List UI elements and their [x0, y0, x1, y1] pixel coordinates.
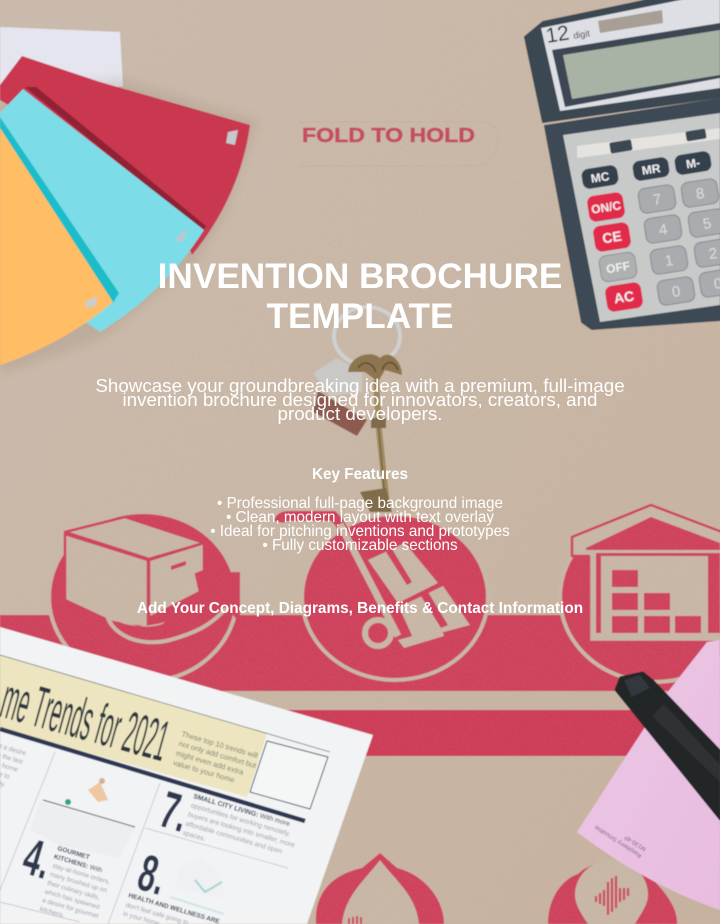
flyer: home trends for 2021: [0, 627, 373, 924]
feature list: • Clean, modern layout with text overlay: [226, 509, 494, 526]
icon: hand truck with boxes: [279, 514, 488, 680]
function keys: MR: [641, 161, 662, 178]
function keys: MC: [590, 169, 611, 186]
number keys: 8: [695, 185, 706, 203]
flyer item 7: buyers are looking into smaller, more: [187, 811, 296, 849]
function keys: CE: [601, 228, 623, 246]
flyer rule: [0, 729, 305, 821]
icon: box with return arrow: [49, 512, 240, 682]
flyer item 8: 8.: [132, 844, 173, 907]
flashlight: [615, 672, 720, 820]
flyer cut-off text: [0, 742, 27, 792]
heading: TEMPLATE: [266, 297, 454, 336]
flyer item 4: KITCHENS: With: [53, 854, 103, 874]
flyer item 7: spaces.: [182, 830, 206, 843]
feature list: [210, 495, 510, 554]
subtitle: product developers.: [278, 403, 442, 424]
lower icon: drop: [316, 853, 444, 924]
12 digit: 12 digit: [544, 18, 591, 48]
flyer item 4: their culinary skills,: [46, 880, 101, 902]
solar panel: [598, 10, 663, 33]
paint chip: orange: [0, 128, 113, 365]
function keys: [581, 150, 712, 313]
chip label: Raspberry Smoothie: [593, 823, 643, 858]
feature list: • Professional full-page background image: [217, 495, 503, 512]
red band upper: [0, 615, 720, 691]
flyer item 4: kitchens.: [39, 906, 66, 920]
number keys: 7: [652, 191, 663, 209]
flyer illustration: kitchen: [30, 778, 135, 858]
flyer item 7: opportunities for working remotely,: [190, 802, 291, 838]
function keys: AC: [613, 288, 635, 306]
lower icon: circle with star: [548, 860, 677, 924]
calculator screen: [563, 30, 720, 99]
flyer: home trends for 2021: me Trends for 2021: [0, 666, 176, 774]
flyer item 7: SMALL CITY LIVING: With more: [192, 793, 291, 828]
number keys: 4: [658, 221, 669, 239]
flyer intro: These top 10 trends will: [180, 729, 259, 760]
heading: [158, 257, 562, 336]
paint chip: pink: [577, 640, 720, 910]
keys: [313, 307, 402, 512]
flyer intro: value to your home: [172, 758, 236, 785]
flyer item 4: stay-at-home orders,: [51, 862, 111, 886]
subtitle: invention brochure designed for innovators, creators, and: [122, 389, 598, 410]
fold to hold label: [300, 122, 498, 166]
paint chips shadow: [0, 78, 258, 375]
subtitle: [95, 375, 625, 424]
flyer item 7: 7.: [154, 781, 195, 844]
flyer item 4: a desire for gourmet: [41, 897, 99, 920]
paint chip: red: [0, 56, 250, 255]
icon: warehouse: [560, 505, 720, 682]
number keys: 2: [708, 245, 719, 263]
flyer illustration: yoga: [170, 858, 226, 914]
paint chip: white: [0, 27, 123, 95]
flyer item 4: 4.: [17, 828, 58, 891]
flyer item 4: which has spawned: [43, 888, 101, 911]
call to action: Add Your Concept, Diagrams, Benefits & Contact Information: [137, 600, 583, 617]
red band lower: [270, 710, 670, 756]
flyer item 4: GOURMET: [56, 845, 90, 861]
flyer item 4: [17, 828, 116, 924]
number keys: 5: [702, 215, 713, 233]
feature list: • Fully customizable sections: [262, 537, 458, 554]
function keys: ON/C: [590, 198, 622, 217]
number keys: 0: [671, 283, 682, 301]
function keys: M-: [685, 155, 701, 172]
function keys: OFF: [605, 259, 631, 276]
fold to hold label: FOLD TO HOLD: [302, 125, 475, 147]
flyer banner: [0, 655, 267, 797]
flyer item 7: affordable communities and open: [184, 821, 283, 856]
number keys: [637, 178, 720, 306]
flyer item 7: [154, 781, 301, 868]
chip label: M130-4P: [624, 833, 647, 852]
paint chip: turquoise: [0, 89, 204, 332]
flyer item 8: [122, 844, 221, 924]
flyer item 4: many brushed up on: [49, 871, 108, 895]
feature list: • Ideal for pitching inventions and prototypes: [210, 523, 510, 540]
flyer blank box: [250, 741, 328, 809]
flyer intro: [172, 729, 261, 790]
key features heading: Key Features: [312, 466, 408, 483]
flyer grid lines: [0, 752, 288, 924]
calculator: [525, 0, 720, 329]
number keys: 1: [664, 252, 675, 270]
heading: INVENTION BROCHURE: [158, 257, 562, 296]
keypad plate: [563, 113, 720, 322]
subtitle: Showcase your groundbreaking idea with a premium, full-image: [95, 375, 625, 396]
flyer intro: not only add comfort but: [178, 739, 258, 770]
flyer intro: might even add extra: [175, 748, 245, 777]
